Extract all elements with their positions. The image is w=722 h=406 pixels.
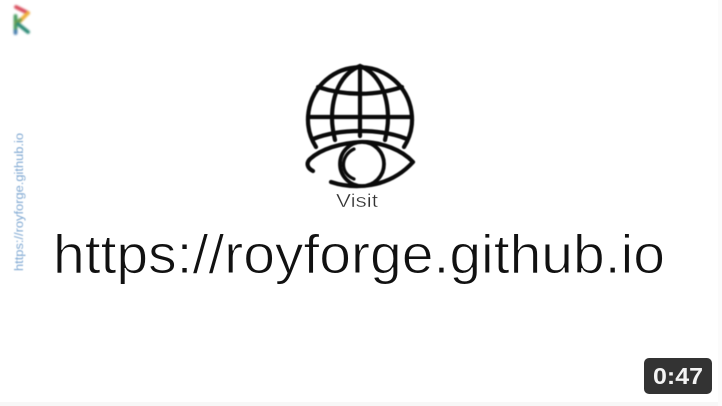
eye outline	[308, 142, 413, 186]
main url heading: https://royforge.github.io	[53, 223, 665, 285]
globe meridians	[332, 66, 388, 140]
icon: globe with eye	[308, 66, 413, 186]
icon: logo	[16, 7, 28, 33]
eye iris	[340, 142, 384, 186]
visit label: Visit	[336, 191, 378, 211]
duration badge	[644, 358, 712, 394]
vertical url text: https://royforge.github.io	[14, 133, 26, 271]
globe parallels	[308, 87, 412, 139]
eye inner crescent	[343, 149, 354, 179]
globe outline	[308, 67, 412, 147]
duration badge: 0:47	[653, 363, 703, 389]
